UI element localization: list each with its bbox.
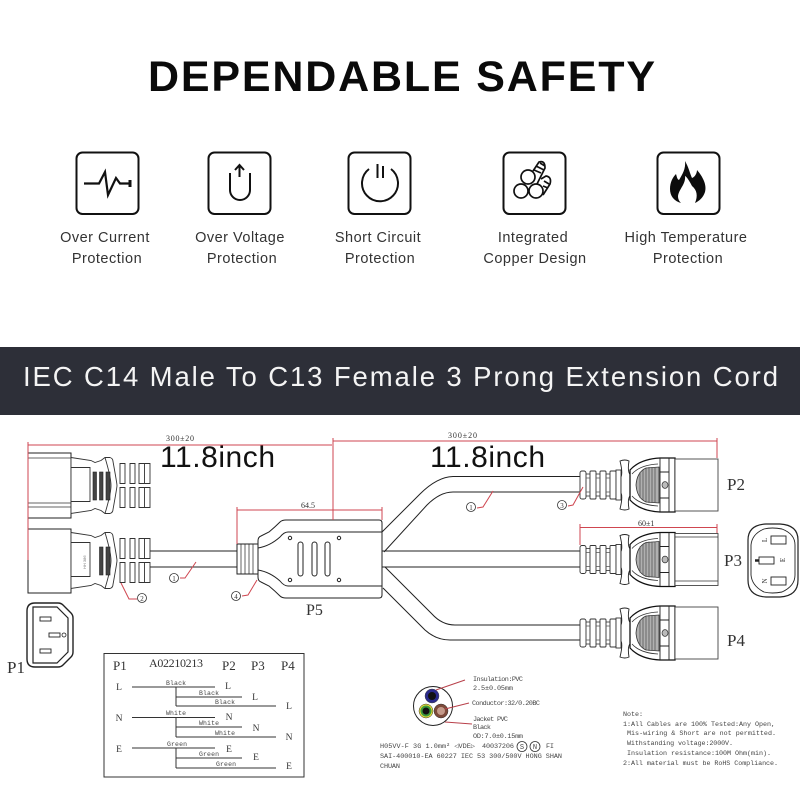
pin letters: L: [252, 693, 258, 703]
label: high temperature protection: High Temperature: [624, 230, 748, 246]
dimension: connector length: [580, 519, 717, 545]
title: DEPENDABLE SAFETY: [148, 53, 655, 101]
wire colours: Black: [166, 680, 186, 687]
left length callout: 11.8inch: [160, 441, 275, 474]
pin letters: E: [226, 745, 232, 755]
wire: green-yellow: [419, 704, 433, 718]
dimension: right cable length: 300±20: [448, 431, 477, 440]
splitter body P5: [258, 520, 382, 598]
wire colours: [166, 680, 236, 768]
label: high temperature protection: Protection: [653, 251, 723, 267]
callout 1 right: [466, 491, 493, 512]
note: 1:All Cables are 100% Tested:Any Open,: [623, 721, 775, 729]
cable marking text: [380, 742, 562, 771]
pin letters: E: [116, 745, 122, 755]
connector: P1 upper plug: [28, 453, 150, 518]
label: integrated copper design: Copper Design: [483, 251, 587, 267]
plug face P3: E: [779, 558, 787, 562]
plug face P3: [748, 524, 798, 597]
label: over voltage protection: Over Voltage: [195, 230, 285, 246]
pin letters: L: [225, 682, 231, 692]
icon: flame: [658, 152, 720, 214]
callout 3: [558, 487, 583, 510]
feature: over voltage protection: [195, 152, 285, 267]
pin letters: N: [226, 713, 233, 723]
cable marking text: N: [533, 744, 537, 752]
label: over voltage protection: Protection: [207, 251, 277, 267]
note: Note:: [623, 711, 643, 719]
icon: power symbol: [348, 152, 410, 214]
label: over current protection: Protection: [72, 251, 142, 267]
callout 4: 4: [234, 593, 238, 601]
banner heading: IEC C14 Male To C13 Female 3 Prong Extension Cord: [23, 361, 778, 392]
wire colours: Green: [199, 751, 219, 758]
wiring header: P1: [113, 658, 127, 673]
cable specifications: [472, 676, 540, 741]
pin letters: [116, 682, 293, 772]
callout 4: [232, 580, 257, 601]
wiring header: [113, 656, 295, 673]
label: integrated copper design: Integrated: [498, 230, 568, 246]
note: Mis-wiring & Short are not permitted.: [627, 730, 776, 738]
callout 1 left: [170, 562, 196, 583]
label: short circuit protection: Protection: [345, 251, 415, 267]
label P2: P2: [727, 475, 745, 494]
callout 2: 2: [140, 595, 144, 603]
wiring header: P2: [222, 658, 236, 673]
dimension: connector length: 60±1: [638, 519, 654, 528]
wire colours: White: [199, 720, 219, 727]
wire colours: White: [215, 730, 235, 737]
wire colours: Green: [216, 761, 236, 768]
cable specifications: Black: [473, 724, 491, 732]
pin letters: N: [116, 714, 123, 724]
connector: P1 lower plug: [28, 529, 150, 593]
dimension: splitter length: 64.5: [301, 501, 315, 510]
cable specifications: 2.5±0.05mm: [473, 685, 513, 693]
pin letters: N: [286, 733, 293, 743]
wiring header: P4: [281, 658, 295, 673]
connector: P4: [580, 606, 718, 660]
cable specifications: OD:7.0±0.15mm: [473, 733, 523, 741]
callout 2: [121, 583, 146, 603]
wire: brown: [434, 704, 448, 718]
icon: U arrow: [208, 152, 270, 214]
wire colours: Black: [199, 690, 219, 697]
wiring header: P3: [251, 658, 265, 673]
label P5: P5: [306, 602, 323, 619]
dimension: left cable length: 300±20: [166, 434, 194, 443]
cable lines: [150, 476, 580, 640]
label: short circuit protection: Short Circuit: [335, 230, 421, 246]
pin letters: E: [286, 762, 292, 772]
cable marking text: SAI-400010-EA 60227 IEC 53 300/500V HONG SHAN: [380, 753, 562, 761]
callout 1 left: 1: [172, 575, 176, 583]
connector: P2: [580, 458, 718, 512]
pin letters: E: [253, 753, 259, 763]
note: Withstanding voltage:2000V.: [627, 740, 733, 748]
cable specifications: Conductor:32/0.20BC: [472, 700, 540, 708]
boot at splitter: [237, 544, 258, 574]
cable specifications: Jacket PVC: [473, 716, 508, 724]
label P1: P1: [7, 658, 25, 677]
connector: P3: [580, 532, 718, 586]
feature: high temperature protection: [624, 152, 748, 267]
wire colours: Black: [215, 699, 235, 706]
dimension: right cable length: [333, 431, 717, 520]
feature: integrated copper design: [483, 152, 587, 267]
note: [623, 711, 778, 768]
wire: blue: [425, 689, 439, 703]
right length callout: 11.8inch: [430, 441, 545, 474]
dimension: splitter length: [237, 501, 382, 544]
note: 2:All material must be RoHS Compliance.: [623, 760, 778, 768]
connector: P1 lower plug: HH 386: [82, 555, 87, 569]
note: Insulation resistance:100M Ohm(min).: [627, 750, 771, 758]
callout 3: 3: [560, 502, 564, 510]
label P3: P3: [724, 551, 742, 570]
cable marking text: CHUAN: [380, 763, 400, 771]
cable specifications: Insulation:PVC: [473, 676, 523, 684]
cable marking text: S: [520, 744, 524, 752]
banner: [0, 347, 800, 415]
pin letters: L: [286, 702, 292, 712]
label: over current protection: Over Current: [60, 230, 150, 246]
feature: short circuit protection: [335, 152, 421, 267]
wiring lines: [132, 687, 276, 768]
icon: pulse line: [76, 152, 138, 214]
label P4: P4: [727, 631, 745, 650]
dimension: left cable length: [28, 434, 332, 560]
plug face P3: L: [761, 538, 769, 542]
wire colours: White: [166, 710, 186, 717]
panel: wiring diagram: [104, 654, 304, 777]
cable marking text: 40037206: [482, 743, 514, 751]
feature: over current protection: [60, 152, 150, 267]
pin letters: N: [253, 724, 260, 734]
wiring header: A02210213: [149, 656, 203, 670]
icon: copper rods: [504, 152, 566, 214]
callout 1 right: 1: [469, 504, 473, 512]
cable cross-section: [414, 680, 472, 726]
pin letters: L: [116, 683, 122, 693]
cable drawing: [28, 453, 718, 660]
cable marking text: H05VV-F 3G 1.0mm² ◁VDE▷: [380, 743, 476, 751]
wire colours: Green: [167, 741, 187, 748]
plug face P3: N: [761, 578, 769, 584]
plug face P1: [27, 603, 73, 667]
cable marking text: FI: [546, 743, 554, 751]
